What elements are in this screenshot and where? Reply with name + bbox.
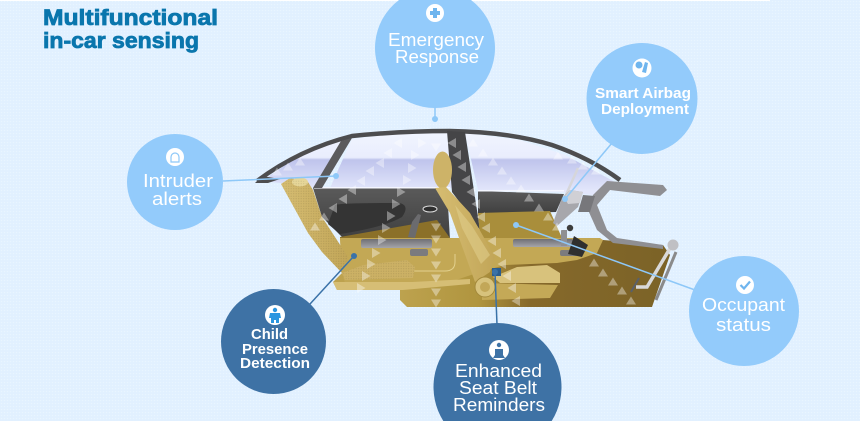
icon: check mark [736,276,754,294]
callout: Emergency Response: Response [395,47,479,67]
dashboard and steering wheel [553,168,667,257]
title: Multifunctional [43,5,218,30]
sensing signal triangles [272,138,636,308]
callout: Enhanced Seat Belt Reminders [434,269,562,421]
callout: Enhanced Seat Belt Reminders: Reminders [453,395,545,415]
callout: Smart Airbag Deployment: Deployment [601,101,689,118]
callout: Occupant status: status [716,315,771,335]
callout: Child Presence Detection: Presence [242,341,308,358]
car cutaway illustration [255,131,678,308]
callout: Smart Airbag Deployment [562,43,698,202]
callout: Emergency Response: Emergency [388,30,484,50]
callout: Intruder alerts [127,134,339,230]
callout: Child Presence Detection [221,253,357,394]
callout: Intruder alerts: alerts [152,189,202,209]
icon: medical cross [426,4,444,22]
callout: Occupant status: Occupant [702,295,785,315]
pedal lever [631,240,678,300]
callout: Enhanced Seat Belt Reminders: Enhanced [455,361,542,381]
rear seat [281,178,415,280]
icon: seat belt [489,340,509,360]
title: in-car sensing [43,28,199,53]
icon: alarm bell [166,148,184,166]
door panels and floor [333,211,670,307]
callout: Intruder alerts: Intruder [143,171,213,191]
icon: child figure [265,305,285,325]
callout: Emergency Response [375,0,495,122]
callout: Smart Airbag Deployment: Smart Airbag [595,85,691,102]
callout: Child Presence Detection: Child [251,326,288,343]
interior dark door panels [313,187,564,240]
front seat [433,152,560,300]
callout: Enhanced Seat Belt Reminders: Seat Belt [459,378,537,398]
callout: Child Presence Detection: Detection [240,355,310,372]
title [43,5,218,53]
windows [262,132,615,195]
callout: Occupant status [513,222,799,366]
icon: airbag [632,58,652,78]
roof and pillars [255,131,620,230]
